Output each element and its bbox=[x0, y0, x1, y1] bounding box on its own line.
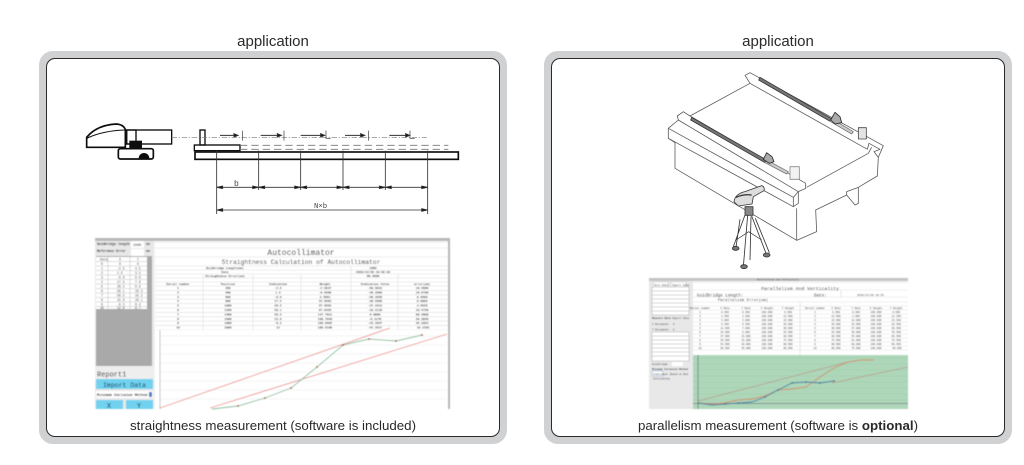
results table: 168.7848 bbox=[318, 318, 332, 321]
date label: Date: bbox=[814, 294, 827, 298]
sheet title: Parallelism And Verticality bbox=[761, 286, 839, 292]
software sidebar: Guidbridge bbox=[652, 362, 668, 366]
button: import data: Import Data bbox=[103, 382, 146, 389]
results table: 147.7911 bbox=[318, 313, 332, 316]
results table: -9.6 bbox=[274, 296, 282, 299]
software sidebar: mm bbox=[146, 243, 150, 247]
icon: front mirror bbox=[763, 153, 774, 163]
parallelism table: 37.000 bbox=[851, 327, 861, 330]
parallelism table: 8 bbox=[699, 339, 701, 342]
results table: -43.2947 bbox=[368, 322, 382, 325]
parallelism table: 100.000 bbox=[762, 327, 773, 330]
results table: 5 bbox=[177, 305, 179, 308]
software sidebar: Import Data bbox=[672, 317, 690, 320]
parallelism table: 1 bbox=[699, 311, 701, 314]
sheet subtitle: Straightness Calculation of Autocollimator bbox=[222, 259, 381, 266]
software sidebar: 1.5 bbox=[117, 271, 123, 275]
diagram: straightness setup bbox=[87, 124, 458, 214]
button: X bbox=[96, 400, 123, 411]
upper envelope line bbox=[160, 328, 390, 408]
software sidebar: Individual bbox=[653, 373, 669, 376]
software sidebar: 8 bbox=[101, 298, 103, 302]
software sidebar: Calculating bbox=[653, 378, 670, 380]
screenshot: parallelism software bbox=[649, 278, 908, 409]
parallelism table: 75.500 bbox=[892, 339, 901, 342]
results sheet: 68.4800 bbox=[367, 275, 379, 278]
chart: straightness curve bbox=[155, 241, 450, 409]
heading: left application: application bbox=[237, 33, 309, 50]
diagram: parallelism setup bbox=[668, 73, 883, 269]
parallelism table: 68.000 bbox=[851, 343, 861, 346]
results sheet: 2020/12/30 10:50:10 bbox=[356, 270, 390, 274]
parallelism table: 11.500 bbox=[720, 327, 730, 330]
parallelism table: 100.000 bbox=[871, 315, 882, 318]
parallelism table: 9 bbox=[699, 343, 701, 346]
parallelism table: X Data bbox=[720, 307, 730, 310]
parallelism table: 90.500 bbox=[892, 343, 901, 346]
software sidebar bbox=[649, 281, 693, 409]
parallelism table: 25.500 bbox=[851, 323, 861, 326]
parallelism table: 30.500 bbox=[783, 327, 793, 330]
results table: 3 bbox=[177, 296, 179, 299]
parallelism table: 90.500 bbox=[783, 343, 793, 346]
software sidebar: X bbox=[119, 258, 121, 262]
results table: 17.5 bbox=[274, 300, 282, 303]
results table: 68.4800 bbox=[416, 313, 429, 316]
software sidebar: 1000 bbox=[133, 244, 141, 248]
parallelism table: 100.000 bbox=[871, 323, 882, 326]
software sidebar: 7.6 bbox=[135, 280, 141, 284]
parallelism table: 100.000 bbox=[871, 331, 882, 334]
parallelism table: 61.000 bbox=[851, 339, 861, 342]
parallelism table: 9 bbox=[814, 343, 816, 346]
software sidebar: 56.5 bbox=[117, 294, 125, 298]
parallelism table: 4 bbox=[699, 323, 701, 326]
results table: 4 bbox=[177, 300, 179, 303]
parallelism table: 55.000 bbox=[851, 335, 861, 338]
guidbridge length: Guidbridge Length: bbox=[697, 294, 743, 298]
parallelism table: 2.000 bbox=[852, 315, 860, 318]
step arrows bbox=[220, 131, 415, 141]
software sidebar: 8.7 bbox=[135, 306, 141, 310]
method selector bbox=[96, 391, 153, 398]
software sidebar: Based on Bnd bbox=[670, 373, 689, 376]
parallelism table: 75.000 bbox=[851, 347, 861, 350]
button: Y: Y bbox=[137, 403, 142, 411]
software sidebar: 8.3 bbox=[135, 302, 141, 306]
parallelism table: 60.500 bbox=[831, 335, 841, 338]
straightedge bar bbox=[195, 152, 458, 159]
results table: Height bbox=[320, 282, 331, 286]
results table: 3.5526 bbox=[417, 305, 428, 308]
heading: right application: application bbox=[742, 33, 814, 50]
software sidebar: Y Parameter bbox=[652, 328, 670, 332]
parallelism table: 100.000 bbox=[762, 315, 773, 318]
panel: straightness frame bbox=[39, 51, 507, 444]
results table: -46.3560 bbox=[368, 291, 382, 294]
button: import data bbox=[96, 379, 153, 389]
results table: 8 bbox=[177, 318, 179, 321]
software sidebar: 18.3 bbox=[135, 289, 143, 293]
software sidebar: mm bbox=[146, 250, 150, 254]
parallelism table: X Height bbox=[870, 306, 883, 310]
software sidebar: Y bbox=[137, 258, 139, 262]
results table: 1400 bbox=[224, 313, 232, 316]
parallelism table: 9.000 bbox=[742, 331, 750, 334]
software sidebar: Reference Error bbox=[97, 249, 126, 253]
results table: Indication false bbox=[361, 282, 390, 286]
results sheet: Date bbox=[221, 271, 229, 274]
parallelism table: Y Data bbox=[741, 307, 751, 310]
parallelism table: 4.000 bbox=[742, 319, 750, 322]
results table: 1800 bbox=[224, 322, 232, 325]
results table: -41.3517 bbox=[368, 327, 382, 330]
parallelism table: 10 bbox=[813, 347, 817, 350]
software sidebar: 0 bbox=[101, 262, 103, 266]
parallelism table: 3.000 bbox=[721, 319, 729, 322]
software sidebar: 15.6 bbox=[117, 298, 125, 302]
parallelism table: 45.500 bbox=[720, 339, 730, 342]
parallelism table: 0.500 bbox=[852, 311, 860, 314]
parallelism table: 21.000 bbox=[741, 339, 751, 342]
caption: parallelism: parallelism measurement (software is optional) bbox=[638, 418, 918, 433]
results sheet: Guidbridge Length(mm) bbox=[206, 266, 244, 270]
software sidebar: 28.1 bbox=[135, 298, 143, 302]
results table: 25.1853 bbox=[416, 322, 429, 325]
panel: parallelism frame bbox=[544, 51, 1012, 444]
parallelism table: 14.000 bbox=[851, 319, 861, 322]
results table: 18.6700 bbox=[416, 291, 429, 294]
reference line upper bbox=[698, 362, 848, 401]
results table: -2.5037 bbox=[319, 287, 331, 290]
back rail bbox=[759, 77, 853, 134]
results table: 3.5561 bbox=[320, 296, 331, 299]
parallelism table: 60.500 bbox=[720, 347, 730, 350]
parallelism table: Serial number bbox=[690, 306, 711, 310]
parallelism table: Y Height bbox=[890, 306, 903, 310]
software sidebar: Minimum Inclusion Method bbox=[652, 368, 689, 371]
results table: 200 bbox=[225, 287, 231, 290]
parallelism table: Y Height bbox=[782, 306, 795, 310]
parallelism table: 12.500 bbox=[892, 315, 901, 318]
results table: 56.5 bbox=[274, 313, 282, 316]
parallelism table: 8 bbox=[814, 339, 816, 342]
parallelism table: 99.500 bbox=[892, 347, 902, 350]
parallelism table: 20.500 bbox=[783, 323, 793, 326]
software sidebar: 17.5 bbox=[117, 280, 125, 284]
results table: -56.3558 bbox=[368, 296, 382, 299]
results table: 400 bbox=[225, 291, 231, 294]
parallelism table: 45.500 bbox=[892, 331, 901, 334]
results table: 21.5562 bbox=[319, 300, 331, 303]
software sidebar: 18.2 bbox=[135, 294, 143, 298]
parallelism table: 90.500 bbox=[831, 343, 841, 346]
software sidebar: -2.5 bbox=[117, 266, 125, 270]
parallelism table: 1 bbox=[814, 311, 816, 314]
software sidebar: 1 bbox=[101, 266, 103, 270]
icon: mirror carriage bbox=[194, 130, 240, 151]
parallelism table: 15.500 bbox=[892, 319, 901, 322]
method selector: Minimum Inclusion Method bbox=[97, 393, 147, 398]
dimension lines bbox=[217, 151, 428, 214]
screenshot: straightness software bbox=[95, 238, 450, 411]
software sidebar: Guidbridge length bbox=[97, 242, 130, 246]
software sidebar: 12.0 bbox=[117, 306, 125, 310]
results table: 47.5563 bbox=[319, 305, 331, 308]
parallelism table: 5 bbox=[699, 327, 701, 330]
parallelism table: 28.000 bbox=[741, 343, 751, 346]
results table: 0.0000 bbox=[417, 300, 428, 303]
parallelism table: 7 bbox=[814, 335, 816, 338]
software sidebar: Zero Data bbox=[654, 284, 668, 287]
results table: 15.6 bbox=[274, 318, 282, 321]
results sheet: Straightness Error(um) bbox=[205, 274, 245, 278]
results table: -37.1512 bbox=[368, 305, 382, 308]
parallelism table: 20.500 bbox=[831, 323, 841, 326]
parallelism table: 5.500 bbox=[742, 323, 750, 326]
results table: 58.1 bbox=[274, 309, 282, 312]
software sidebar: 6 bbox=[101, 289, 103, 293]
results table: -0.5560 bbox=[319, 291, 331, 294]
parallelism table: Serial number bbox=[805, 306, 826, 310]
software sidebar: 0 bbox=[137, 262, 139, 266]
results table: 1.5 bbox=[275, 291, 281, 294]
software sidebar: 10 bbox=[100, 306, 104, 310]
software sidebar: 3.5 bbox=[135, 271, 141, 275]
parallelism table: 99.500 bbox=[783, 347, 793, 350]
parallelism table: 52.500 bbox=[720, 343, 730, 346]
software sidebar: X Parameter bbox=[652, 323, 670, 326]
results table: -50.5033 bbox=[368, 287, 382, 290]
data line bbox=[212, 335, 422, 409]
parallelism table: 100.000 bbox=[871, 335, 882, 338]
results table: 18.4756 bbox=[416, 309, 429, 312]
software sidebar: 0 bbox=[119, 262, 121, 266]
software sidebar: 4 bbox=[101, 280, 103, 284]
software sidebar: 28.5 bbox=[117, 284, 125, 288]
lower envelope line bbox=[210, 334, 447, 408]
report selector: Report1 bbox=[97, 372, 126, 380]
results table: 19.1283 bbox=[417, 327, 429, 330]
dimension label b: b bbox=[234, 180, 239, 189]
parallelism table: 1.500 bbox=[721, 315, 729, 318]
results table: 189.5199 bbox=[318, 327, 332, 330]
software sidebar bbox=[95, 241, 154, 411]
parallelism table: 10 bbox=[698, 347, 702, 350]
parallelism table: 0.500 bbox=[721, 311, 729, 314]
results sheet bbox=[690, 283, 908, 355]
parallelism table: 35.000 bbox=[741, 347, 751, 350]
software sidebar: 0.6 bbox=[135, 276, 141, 280]
sheet title: Autocollimator bbox=[267, 249, 335, 258]
results table: 6 bbox=[177, 309, 179, 312]
parallelism table: 100.000 bbox=[871, 343, 882, 346]
results table: 10 bbox=[176, 327, 180, 330]
dashed step positions bbox=[240, 145, 448, 149]
parallelism table: 100.000 bbox=[871, 339, 882, 342]
parallelism table: 100.000 bbox=[871, 327, 882, 330]
results table: 12 bbox=[276, 327, 280, 330]
results table: 2000 bbox=[224, 327, 232, 330]
icon: back mirror bbox=[831, 112, 842, 124]
parallelism table: 5 bbox=[814, 327, 816, 330]
software sidebar: 58.1 bbox=[117, 289, 125, 293]
parallelism table: 15.000 bbox=[741, 335, 751, 338]
parallelism table: 3 bbox=[699, 319, 701, 322]
results table: 1600 bbox=[224, 318, 232, 321]
results table: Position bbox=[221, 282, 235, 286]
parallelism table: 30.500 bbox=[892, 327, 901, 330]
sheet subheading: Parallelism Error(um) bbox=[718, 298, 768, 303]
software sidebar: -8.3 bbox=[117, 302, 125, 306]
results sheet: 2020/12/30 10:35 bbox=[857, 293, 884, 297]
results table: 7 bbox=[177, 313, 179, 316]
results sheet bbox=[155, 243, 449, 409]
chart: parallelism curves bbox=[693, 355, 908, 409]
results table: 169.9592 bbox=[318, 322, 332, 325]
parallelism table: 100.000 bbox=[762, 335, 773, 338]
icon: autocollimator on tripod bbox=[732, 186, 770, 269]
parallelism table: 60.500 bbox=[783, 335, 793, 338]
software sidebar: 0.6 bbox=[135, 284, 141, 288]
results table: 59.3626 bbox=[416, 318, 429, 321]
orange series bbox=[698, 360, 874, 404]
parallelism table: 2.000 bbox=[742, 315, 750, 318]
results table: 600 bbox=[225, 296, 231, 299]
icon: back clamp bbox=[858, 128, 866, 139]
parallelism table: 0.500 bbox=[832, 311, 840, 314]
software sidebar: Measure Data bbox=[652, 317, 671, 320]
parallelism table: X Data bbox=[831, 307, 841, 310]
parallelism table: 100.000 bbox=[762, 347, 773, 350]
icon: autocollimator bbox=[87, 124, 172, 159]
results table: Serial number bbox=[166, 282, 190, 286]
software sidebar: Import Data bbox=[672, 284, 690, 287]
results table: -2.5 bbox=[274, 287, 282, 290]
parallelism table: 0.500 bbox=[892, 311, 901, 314]
parallelism table: 2 bbox=[699, 315, 701, 318]
optical axis bbox=[172, 136, 427, 138]
parallelism table: 30.500 bbox=[831, 327, 841, 330]
parallelism table: 7.000 bbox=[742, 327, 750, 330]
parallelism table: 15.500 bbox=[831, 319, 841, 322]
software sidebar: 7 bbox=[101, 294, 103, 298]
parallelism table: 12.500 bbox=[831, 315, 841, 318]
parallelism table: 75.500 bbox=[831, 339, 841, 342]
parallelism table: 2 bbox=[814, 315, 816, 318]
parallelism table: 100.000 bbox=[762, 339, 773, 342]
results table: 1000 bbox=[224, 305, 232, 308]
results table: 2 bbox=[177, 291, 179, 294]
parallelism table: 100.000 bbox=[871, 311, 882, 314]
parallelism table: 100.000 bbox=[762, 319, 773, 322]
parallelism table: 60.500 bbox=[892, 335, 901, 338]
parallelism table: 24.500 bbox=[720, 331, 730, 334]
parallelism table: 6.500 bbox=[721, 323, 729, 326]
parallelism table: 75.500 bbox=[783, 339, 793, 342]
parallelism table: 3 bbox=[814, 319, 816, 322]
results table: -38.5560 bbox=[368, 300, 382, 303]
software sidebar: Data bbox=[100, 258, 108, 262]
results table: 18.4800 bbox=[416, 287, 429, 290]
results table: -10.2128 bbox=[368, 309, 382, 312]
reference line lower bbox=[832, 367, 908, 383]
software sidebar: 5 bbox=[101, 284, 103, 288]
parallelism table: 45.500 bbox=[783, 331, 793, 334]
software sidebar: 3 bbox=[101, 276, 103, 280]
parallelism table: 12.500 bbox=[783, 315, 793, 318]
results sheet: 1000 bbox=[369, 267, 377, 270]
button: X: X bbox=[107, 403, 112, 411]
results table: -8.3 bbox=[274, 322, 282, 325]
icon: front clamp bbox=[790, 167, 799, 179]
parallelism table: X Height bbox=[761, 306, 774, 310]
software sidebar: 4.5 bbox=[135, 266, 141, 270]
parallelism table: 100.000 bbox=[871, 347, 882, 350]
results table: error(um) bbox=[414, 282, 430, 286]
results table: 800 bbox=[225, 300, 231, 303]
button: Y bbox=[126, 400, 153, 411]
blue series bbox=[698, 381, 834, 405]
results table: -9.1178 bbox=[369, 318, 381, 321]
front rail bbox=[691, 117, 788, 174]
window title: Parallelism and Verticality bbox=[757, 278, 799, 282]
parallelism table: 100.000 bbox=[762, 311, 773, 314]
parallelism table: 0.500 bbox=[784, 311, 792, 314]
results table: 9 bbox=[177, 322, 179, 325]
dimension label Nxb: N×b bbox=[314, 203, 327, 211]
results table: 28.5 bbox=[274, 305, 282, 308]
parallelism table: 100.000 bbox=[762, 331, 773, 334]
parallelism table: 4 bbox=[814, 323, 816, 326]
parallelism table: 100.000 bbox=[762, 323, 773, 326]
software sidebar: 0 bbox=[673, 323, 675, 326]
parallelism table: 100.000 bbox=[871, 319, 882, 322]
software sidebar: 9 bbox=[101, 302, 103, 306]
parallelism table: 20.500 bbox=[892, 323, 901, 326]
parallelism table: 49.000 bbox=[851, 331, 861, 334]
parallelism table: 6 bbox=[699, 331, 701, 334]
parallelism table: 100.000 bbox=[762, 343, 773, 346]
parallelism table: 45.500 bbox=[831, 331, 841, 334]
results table: 1200 bbox=[224, 309, 232, 312]
results table: 8.4500 bbox=[417, 296, 428, 299]
parallelism table: 6 bbox=[814, 331, 816, 334]
caption: straightness: straightness measurement (software is included) bbox=[130, 418, 416, 433]
software sidebar: 2 bbox=[101, 271, 103, 275]
parallelism table: 7 bbox=[699, 335, 701, 338]
software sidebar: 0 bbox=[673, 328, 675, 332]
parallelism table: 37.500 bbox=[720, 335, 730, 338]
parallelism table: 15.500 bbox=[783, 319, 793, 322]
parallelism table: 99.500 bbox=[831, 347, 841, 350]
results table: 0.0000 bbox=[370, 313, 381, 316]
results table: 97.6435 bbox=[319, 309, 331, 312]
machine bed bbox=[668, 73, 883, 240]
results table: 1 bbox=[177, 287, 179, 290]
software sidebar: -9.6 bbox=[117, 276, 125, 280]
results table: Indication bbox=[269, 282, 287, 286]
parallelism table: 0.500 bbox=[742, 311, 750, 314]
parallelism table: Y Data bbox=[851, 307, 861, 310]
